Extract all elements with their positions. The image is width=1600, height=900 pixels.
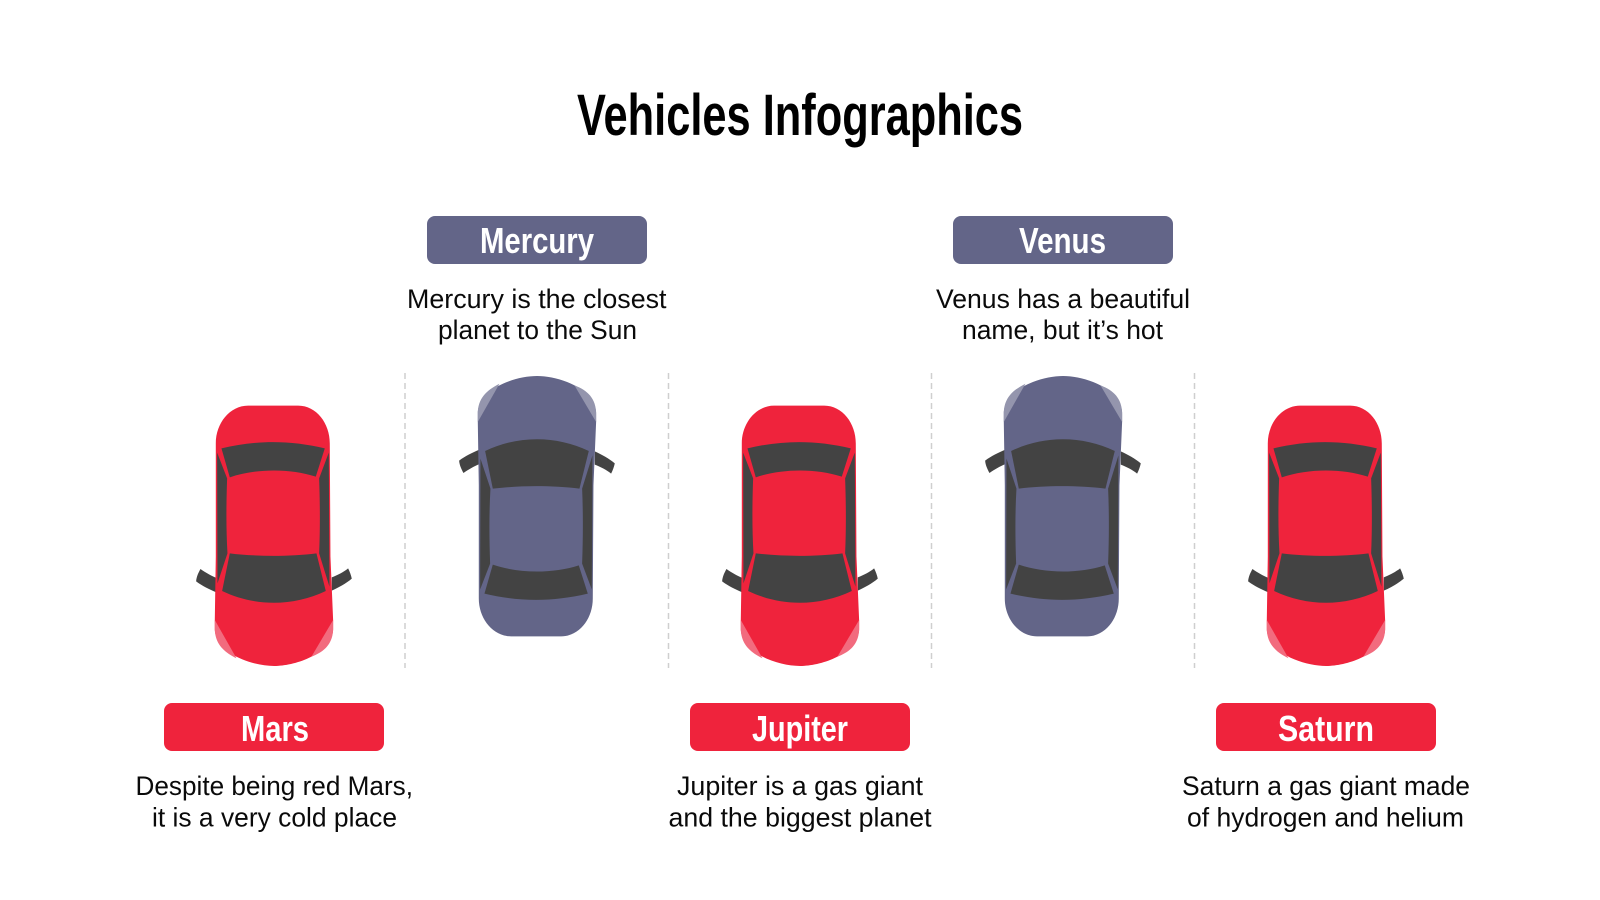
headlights xyxy=(1004,384,1122,422)
badge: Mars xyxy=(164,703,384,751)
description: Mercury: planet to the Sun xyxy=(438,315,637,345)
headlights xyxy=(1267,620,1385,658)
panel: Saturn xyxy=(1182,406,1470,832)
panel: Mercury xyxy=(407,216,667,636)
mirrors xyxy=(459,450,615,474)
mirrors xyxy=(985,450,1141,474)
car: red Mars xyxy=(196,406,352,666)
body xyxy=(478,376,596,636)
windows xyxy=(1006,439,1118,600)
badge: Saturn: Saturn xyxy=(1278,708,1374,749)
description: Mercury: Mercury is the closest xyxy=(407,284,667,314)
badge: Mercury: Mercury xyxy=(480,220,594,261)
description: Mars: it is a very cold place xyxy=(152,802,397,832)
mirrors xyxy=(722,568,878,592)
headlights xyxy=(741,620,859,658)
car: red Jupiter xyxy=(722,406,878,666)
badge: Jupiter: Jupiter xyxy=(752,708,848,749)
body xyxy=(215,406,333,666)
mirrors xyxy=(196,568,352,592)
badge: Mars: Mars xyxy=(241,708,309,749)
description: Mars: Despite being red Mars, xyxy=(136,771,413,801)
car: blue Venus xyxy=(985,376,1141,636)
body xyxy=(1004,376,1122,636)
description: Mercury xyxy=(407,284,667,345)
description: Jupiter: Jupiter is a gas giant xyxy=(677,771,924,801)
description: Jupiter: and the biggest planet xyxy=(668,802,932,832)
description: Mars xyxy=(136,771,413,832)
headlights xyxy=(215,620,333,658)
windows xyxy=(743,442,855,603)
badge: Jupiter xyxy=(690,703,910,751)
windows xyxy=(480,439,592,600)
description: Jupiter xyxy=(668,771,932,832)
title: Vehicles Infographics xyxy=(577,83,1023,148)
car: blue Mercury xyxy=(459,376,615,636)
panel: Venus xyxy=(936,216,1190,636)
description: Venus: name, but it’s hot xyxy=(962,315,1164,345)
body xyxy=(1267,406,1385,666)
description: Venus xyxy=(936,284,1190,345)
badge: Venus xyxy=(953,216,1173,264)
description: Saturn: Saturn a gas giant made xyxy=(1182,771,1470,801)
badge: Mercury xyxy=(427,216,647,264)
panel: Jupiter xyxy=(668,406,932,832)
badge: Saturn xyxy=(1216,703,1436,751)
description: Venus: Venus has a beautiful xyxy=(936,284,1190,314)
body xyxy=(741,406,859,666)
windows xyxy=(1269,442,1381,603)
headlights xyxy=(478,384,596,422)
badge: Venus: Venus xyxy=(1019,220,1106,261)
description: Saturn: of hydrogen and helium xyxy=(1187,802,1464,832)
mirrors xyxy=(1248,568,1404,592)
description: Saturn xyxy=(1182,771,1470,832)
car: red Saturn xyxy=(1248,406,1404,666)
windows xyxy=(217,442,329,603)
panel: Mars xyxy=(136,406,413,832)
